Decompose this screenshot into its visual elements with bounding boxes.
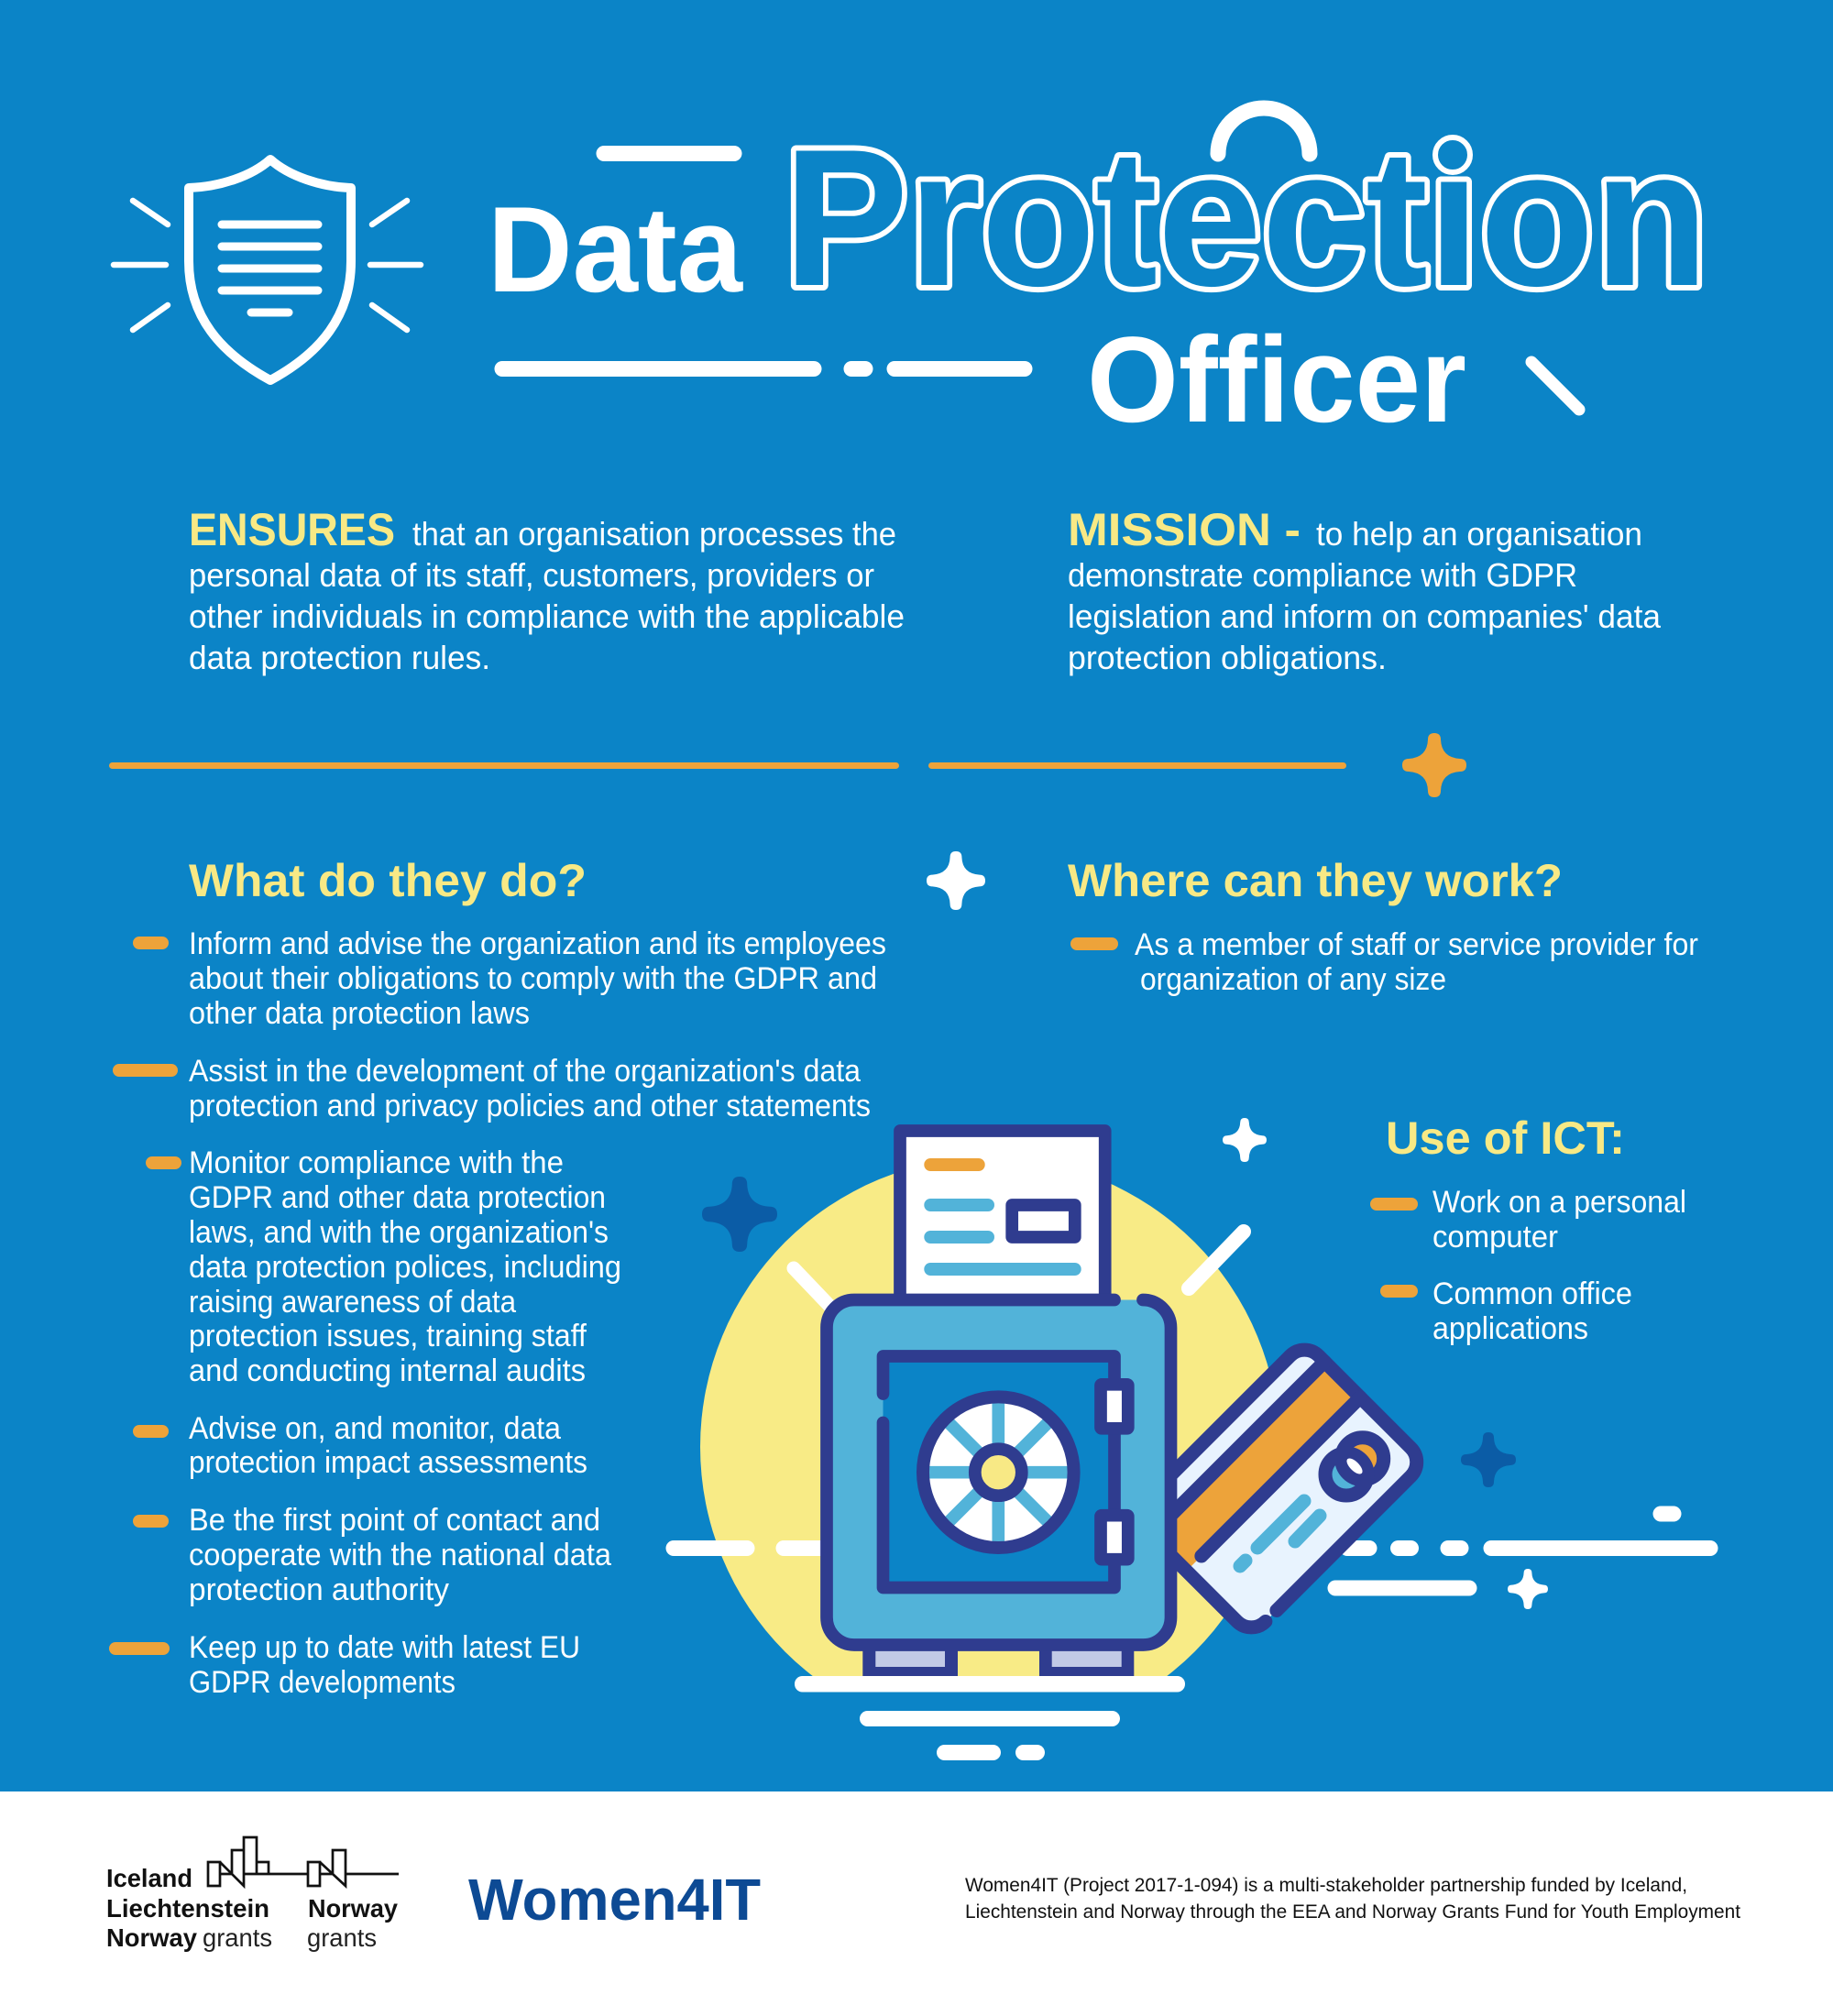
- bullet: advise: Advise on, and monitor, data: [189, 1411, 561, 1446]
- bullet: monitor: laws, and with the organization's: [189, 1215, 609, 1250]
- bullet: assist: protection and privacy policies and other statements: [189, 1089, 871, 1123]
- bullet: inform: Inform and advise the organization and its employees: [189, 926, 886, 961]
- bullet: member of staff: organization of any size: [1140, 962, 1446, 997]
- divider with star: [109, 733, 1466, 797]
- logo: Iceland Liechtenstein Norway grants: Iceland: [106, 1864, 192, 1892]
- decorative stars: [702, 1118, 1548, 1609]
- footer note: [965, 1875, 1740, 1923]
- bullet: first contact: protection authority: [189, 1572, 449, 1607]
- bullet: monitor: [146, 1145, 621, 1388]
- bullet: first contact: cooperate with the national data: [189, 1538, 611, 1572]
- bullet: personal computer: [1370, 1185, 1686, 1255]
- heading: use of ict: Use of ICT:: [1386, 1112, 1625, 1164]
- text block: mission: protection obligations.: [1068, 639, 1387, 676]
- text block: ensures: [189, 504, 905, 676]
- footer note: Liechtenstein and Norway through the EEA and Norway Grants Fund for Youth Employment: [965, 1901, 1740, 1923]
- bullet: keep up to date: GDPR developments: [189, 1665, 456, 1700]
- bullet: monitor: protection issues, training staff: [189, 1319, 587, 1353]
- safe hinges: [1101, 1385, 1128, 1560]
- footer: [0, 1791, 1833, 2016]
- text block: mission: [1068, 504, 1662, 676]
- safe feet: [862, 1645, 1134, 1676]
- motion lines: [674, 1232, 1710, 1588]
- bullet: assist: Assist in the development of the organization's data: [189, 1054, 861, 1089]
- bullet: advise: [133, 1411, 587, 1480]
- logo: Women4IT: Women4IT: [468, 1867, 761, 1933]
- yellow circle: [700, 1173, 1268, 1676]
- title accents: [502, 108, 1579, 410]
- bullet: personal computer: computer: [1432, 1220, 1558, 1255]
- heading: where can they work: Where can they work?: [1068, 855, 1563, 906]
- title: [488, 108, 1708, 448]
- bullet: keep up to date: Keep up to date with latest EU: [189, 1630, 580, 1665]
- bullet: advise: protection impact assessments: [189, 1445, 587, 1480]
- logo: Iceland Liechtenstein Norway grants: Norway: [308, 1894, 398, 1923]
- logo: Iceland Liechtenstein Norway grants: grants: [203, 1923, 272, 1952]
- safe dial: [923, 1397, 1074, 1548]
- round dot of the i: [1430, 128, 1479, 172]
- document: [900, 1131, 1105, 1300]
- icon: shield: [114, 159, 421, 380]
- bullet: first contact: Be the first point of contact and: [189, 1503, 600, 1538]
- bullet: assist: [113, 1054, 871, 1123]
- bullet: keep up to date: [109, 1630, 580, 1700]
- bullet: first contact: [133, 1503, 611, 1607]
- panel: where can they work: [1068, 855, 1698, 997]
- panel: use of ict: [1370, 1112, 1686, 1346]
- bullet: monitor: Monitor compliance with the: [189, 1145, 564, 1180]
- bullet: monitor: data protection polices, including: [189, 1250, 621, 1285]
- logo: Iceland Liechtenstein Norway grants: Liechtenstein: [106, 1894, 269, 1923]
- text block: mission: to help an organisation: [1316, 515, 1642, 553]
- text block: mission: demonstrate compliance with GDPR: [1068, 556, 1577, 594]
- text block: ensures: data protection rules.: [189, 639, 490, 676]
- bullet: office applications: [1380, 1276, 1632, 1346]
- safe door: [884, 1356, 1114, 1587]
- ground lines: [795, 1676, 1185, 1760]
- text block: ensures: that an organisation processes the: [412, 515, 896, 553]
- bullet: member of staff: [1070, 927, 1698, 997]
- icon: white star: [927, 851, 985, 910]
- credit card: [1131, 1342, 1425, 1636]
- bullet: monitor: and conducting internal audits: [189, 1353, 586, 1388]
- logo: Iceland Liechtenstein Norway grants: Norway: [106, 1923, 197, 1952]
- panel: what do they do: [109, 855, 886, 1700]
- title word: Protection: Protection: [784, 109, 1708, 327]
- text block: mission: legislation and inform on companies' data: [1068, 597, 1662, 635]
- logo: Iceland Liechtenstein Norway grants: grants: [307, 1923, 377, 1952]
- bullet: monitor: GDPR and other data protection: [189, 1180, 606, 1215]
- title word: Data: Data: [488, 182, 743, 318]
- illustration: safe with document and card: [674, 1118, 1710, 1760]
- bullet: member of staff: As a member of staff or service provider for: [1135, 927, 1698, 962]
- heading: what do they do: What do they do?: [189, 855, 587, 906]
- bullet: monitor: raising awareness of data: [189, 1285, 516, 1320]
- safe body: [827, 1299, 1171, 1645]
- bullet: office applications: applications: [1432, 1311, 1588, 1346]
- bullet: inform: [133, 926, 886, 1031]
- text block: ensures: personal data of its staff, customers, providers or: [189, 556, 874, 594]
- bullet: inform: about their obligations to comply with the GDPR and: [189, 961, 877, 996]
- text block: mission: MISSION -: [1068, 504, 1301, 555]
- text block: ensures: ENSURES: [189, 504, 395, 555]
- bullet: office applications: Common office: [1432, 1276, 1632, 1311]
- bullet: inform: other data protection laws: [189, 996, 530, 1031]
- bullet: personal computer: Work on a personal: [1432, 1185, 1686, 1220]
- text block: ensures: other individuals in compliance with the applicable: [189, 597, 905, 635]
- footer note: Women4IT (Project 2017-1-094) is a multi-stakeholder partnership funded by Iceland,: [965, 1875, 1687, 1896]
- title word: Officer: Officer: [1087, 312, 1466, 448]
- logo: Iceland Liechtenstein Norway grants: [106, 1837, 399, 1952]
